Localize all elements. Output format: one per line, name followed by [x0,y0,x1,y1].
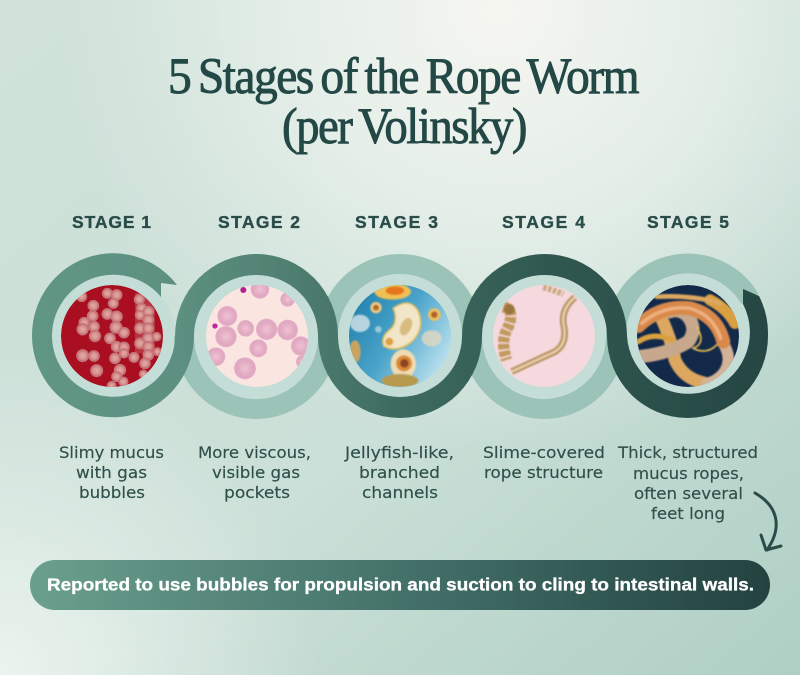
stage 2 description [198,443,311,502]
photo: stage 2 pink cells [206,280,310,387]
stage 1 description: bubbles [79,483,145,502]
photo: stage 1 red agar colonies [61,285,163,390]
banner [30,560,770,610]
stage 5 description: often several [634,484,743,503]
stage 2 description: pockets [224,483,290,502]
stage 5 description: Thick, structured [617,443,758,462]
stage 3 description: Jellyfish-like, [344,443,454,462]
stage 5 description: feet long [651,504,725,523]
stage 2 description: More viscous, [198,443,311,462]
curved arrow to banner [755,493,781,550]
stage headings: STAGE 5 [647,212,729,232]
stage 4 description: rope structure [484,463,603,482]
stage headings [72,212,729,232]
stage 4 description [483,443,605,482]
light back ribbon [184,264,750,409]
photo: stage 4 rope worm on pink slide [493,285,595,387]
title [168,49,639,155]
inner pale discs [51,274,750,398]
stage 1 description: with gas [76,463,147,482]
stage headings: STAGE 3 [355,212,438,232]
banner: Reported to use bubbles for propulsion and suction to cling to intestinal walls. [47,574,754,594]
stage 4 description: Slime-covered [483,443,605,462]
photo: stage 5 tangled rope worms [637,285,739,387]
stage 5 description: mucus ropes, [633,464,744,483]
stage 3 description [344,443,454,502]
descriptions [59,443,758,523]
stage headings: STAGE 2 [218,212,300,232]
photo: stage 3 blue jellyfish-like microbes [349,284,451,387]
title: 5 Stages of the Rope Worm [168,49,639,105]
stage 1 description: Slimy mucus [59,443,164,462]
stage 3 description: channels [362,483,438,502]
stage headings: STAGE 1 [72,212,151,232]
stage 1 description [59,443,164,502]
title: (per Volinsky) [282,99,526,155]
stage 3 description: branched [359,463,440,482]
stage 2 description: visible gas [212,463,300,482]
stage 5 description [617,443,758,523]
stage headings: STAGE 4 [502,212,585,232]
dark winding ribbon with arrowheads [32,253,768,418]
